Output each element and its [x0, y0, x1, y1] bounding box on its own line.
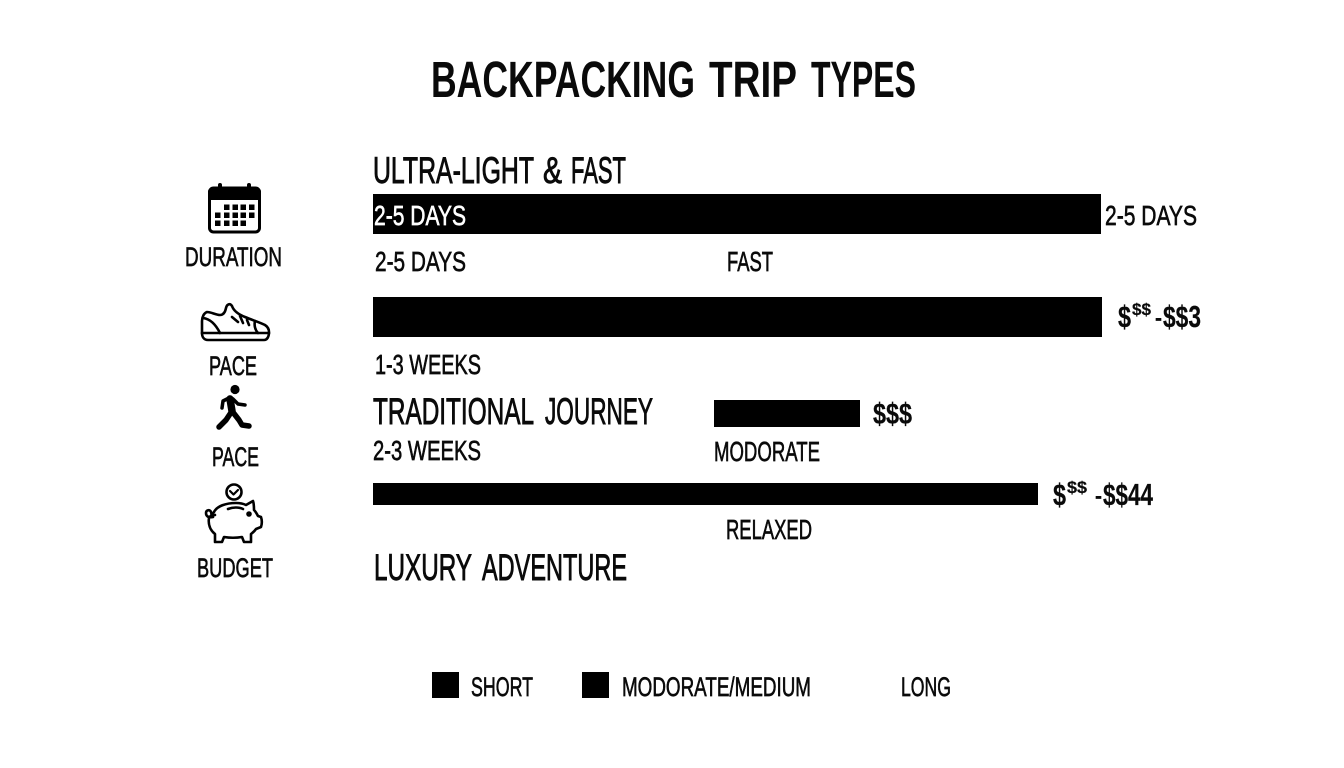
- legend swatch: moderate: [582, 672, 609, 698]
- text: 2-3 weeks: 2-3 WEEKS: [373, 435, 481, 466]
- label: duration: DURATION: [185, 242, 282, 272]
- bar value: cost range: [1118, 299, 1201, 334]
- heading: ultra-light & fast: FAST: [571, 150, 626, 191]
- heading: luxury adventure: ADVENTURE: [482, 547, 627, 588]
- bar value: cost range: $$: [1067, 478, 1088, 497]
- title: BACKPACKING: [431, 51, 695, 108]
- heading: luxury adventure: [374, 547, 627, 588]
- title: TRIP: [709, 51, 797, 108]
- bar value: cost range: $: [1118, 299, 1131, 334]
- label: pace (shoe): PACE: [209, 351, 257, 381]
- bar value: 2-5 days: 2-5 DAYS: [1105, 200, 1197, 231]
- icon: shoe: [202, 304, 269, 340]
- heading: traditional journey: JOURNEY: [545, 391, 653, 432]
- bar label: 2-5 days inside: 2-5 DAYS: [374, 200, 466, 231]
- label: pace (walker): PACE: [212, 442, 259, 472]
- bar value: cost range: $: [1053, 477, 1066, 512]
- icon: calendar: [208, 183, 261, 232]
- legend swatch: short: [432, 672, 459, 698]
- heading: luxury adventure: LUXURY: [374, 547, 472, 588]
- text: 2-5 days: 2-5 DAYS: [375, 246, 466, 277]
- bar value: cost range: -: [1155, 302, 1162, 333]
- bar value: $$$: $$$: [873, 398, 912, 431]
- icon: walking person: [219, 385, 249, 427]
- heading: ultra-light & fast: ULTRA-LIGHT: [373, 150, 534, 191]
- legend label: short: SHORT: [471, 672, 533, 702]
- text: 1-3 weeks: 1-3 WEEKS: [375, 349, 481, 380]
- text: relaxed: RELAXED: [726, 514, 812, 545]
- bar: ultra-light budget: [373, 297, 1102, 337]
- text: fast: FAST: [727, 246, 773, 277]
- title: TYPES: [811, 51, 916, 108]
- legend label: long: LONG: [901, 672, 951, 702]
- heading: traditional journey: TRADITIONAL: [373, 391, 534, 432]
- text: modorate: MODORATE: [714, 436, 820, 467]
- icon: piggy bank with coin: [206, 484, 262, 542]
- bar value: cost range: $$: [1132, 300, 1152, 319]
- heading: ultra-light & fast: &: [543, 150, 562, 191]
- label: budget: BUDGET: [197, 553, 273, 583]
- bar value: cost range: [1053, 477, 1154, 512]
- legend label: moderate/medium: MODORATE/MEDIUM: [622, 672, 811, 702]
- bar value: cost range: $$3: [1163, 299, 1201, 334]
- bar value: cost range: -: [1095, 480, 1102, 511]
- bar value: cost range: $$44: [1103, 477, 1154, 512]
- bar: traditional long: [373, 483, 1038, 505]
- bar: ultra-light duration: [373, 194, 1101, 234]
- legend: [432, 672, 951, 702]
- bar: traditional short: [714, 400, 860, 427]
